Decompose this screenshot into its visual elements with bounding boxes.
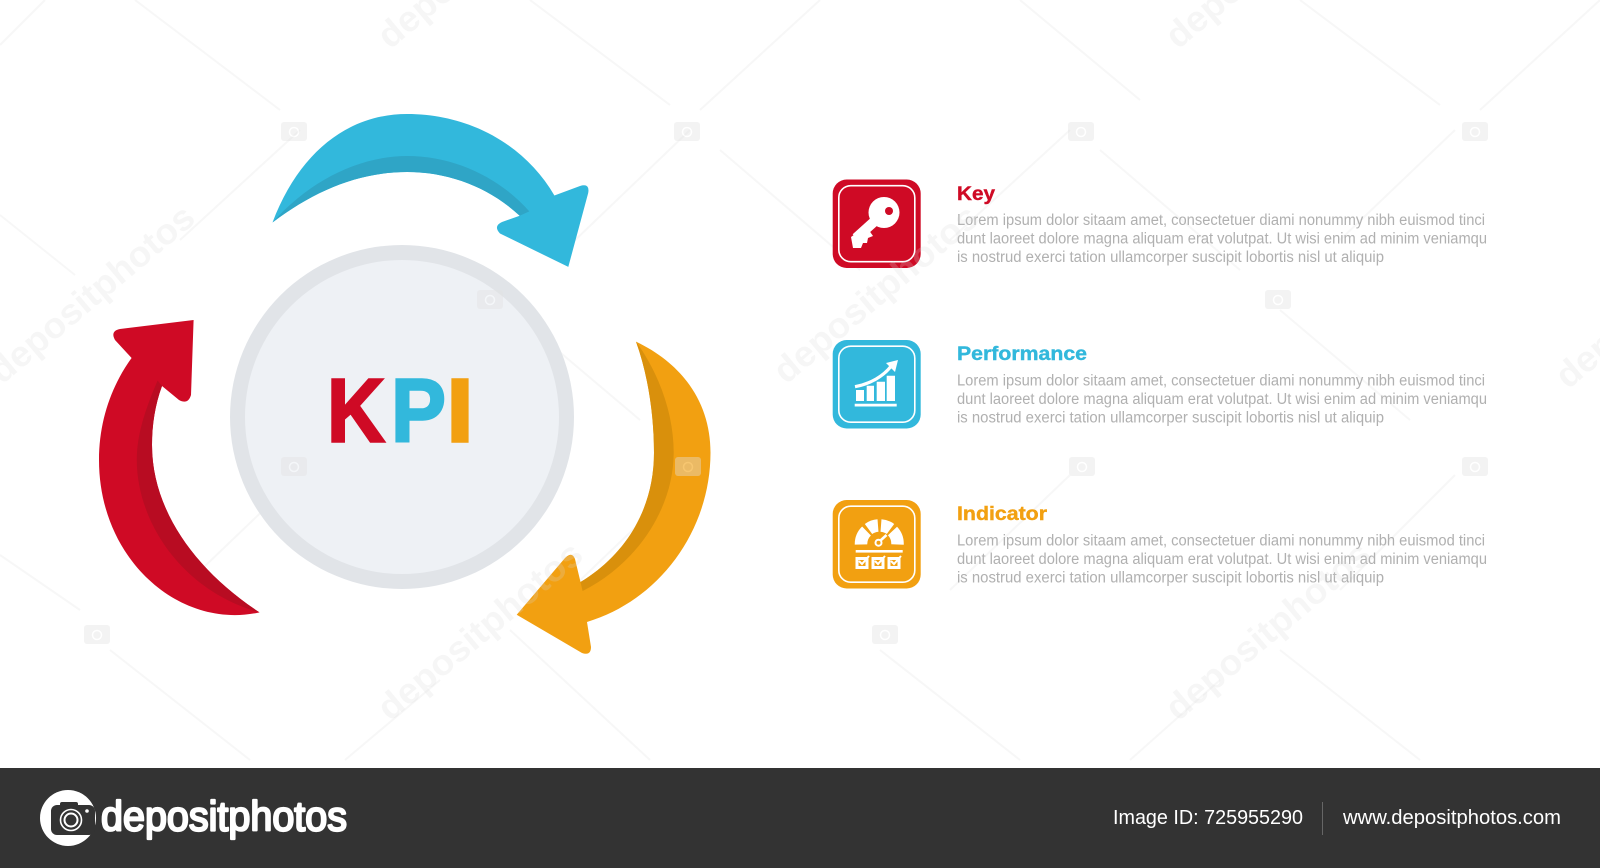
text: depositphotos [369,533,590,728]
text block: Key description: Lorem ipsum dolor sitaam amet, consectetuer diami nonummy nibh euismod tinci [957,212,1485,229]
KPI label [327,362,474,462]
text block: Indicator description: dunt laoreet dolore magna aliquam erat volutpat. Ut wisi enim ad minim veniamqu [957,551,1487,568]
centre circle [230,245,574,589]
heading: Performance: Performance [957,343,1087,365]
text block: Performance description: dunt laoreet dolore magna aliquam erat volutpat. Ut wisi enim ad minim veniamqu [957,391,1487,408]
image id: Image ID: 725955290 [1113,807,1303,829]
KPI label: P [391,362,446,462]
text block: Indicator description [957,532,1487,586]
website: www.depositphotos.com [1342,807,1561,829]
text block: Key description [957,212,1487,266]
arrow: blue [272,114,588,267]
text block: Performance description [957,372,1487,426]
arrow: orange [517,342,710,654]
panel: Indicator row [833,500,1487,588]
icon: growth chart [833,340,921,428]
arrow: red [99,320,260,615]
text block: Key description: is nostrud exerci tation ullamcorper suscipit lobortis nisl ut aliquip [957,249,1384,266]
icon: camera logo [40,790,96,846]
panel: Key row [833,180,1487,268]
text block: Key description: dunt laoreet dolore magna aliquam erat volutpat. Ut wisi enim ad minim veniamqu [957,230,1487,248]
text block: Indicator description: is nostrud exerci tation ullamcorper suscipit lobortis nisl ut aliquip [957,570,1384,586]
panel: Performance row [833,340,1487,428]
text block: Indicator description: Lorem ipsum dolor sitaam amet, consectetuer diami nonummy nibh euismod tinci [957,532,1485,550]
icon: gauge and checkboxes [833,500,921,588]
logo wordmark: depositphotos [101,792,347,840]
heading: Indicator: Indicator [957,503,1047,525]
text block: Performance description: Lorem ipsum dolor sitaam amet, consectetuer diami nonummy nibh euismod tinci [957,372,1485,389]
panel: KPI cycle diagram [99,114,710,654]
footer bar [0,768,1600,868]
text: depositphotos [765,196,986,391]
icon: key [833,180,921,268]
KPI label: K [327,362,385,462]
text: depositphotos [1157,533,1378,728]
text block: Performance description: is nostrud exerci tation ullamcorper suscipit lobortis nisl ut aliquip [957,409,1384,426]
KPI label: I [446,362,474,462]
heading: Key: Key [957,183,995,205]
